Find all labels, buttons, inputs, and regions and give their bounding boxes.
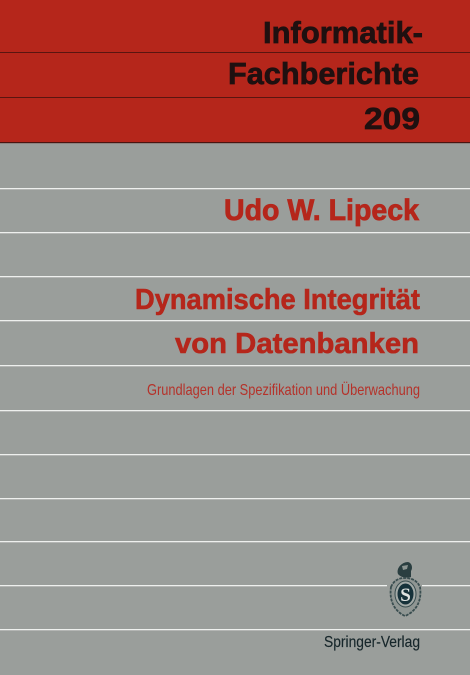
icon: Springer knight logo (391, 562, 420, 616)
series title: Informatik-Fachberichte: Fachberichte (228, 56, 419, 91)
series number: 209 (364, 101, 420, 136)
red series band (0, 0, 470, 143)
series title: Informatik-Fachberichte: Informatik- (263, 15, 423, 50)
icon: Springer knight logo: S (400, 585, 411, 606)
author: Udo W. Lipeck (224, 194, 419, 227)
series title: Informatik-Fachberichte (228, 15, 423, 91)
publisher: Springer-Verlag (324, 634, 420, 651)
book title: von Datenbanken (175, 328, 419, 360)
book title (135, 284, 420, 360)
book title: Dynamische Integrität (135, 284, 420, 316)
